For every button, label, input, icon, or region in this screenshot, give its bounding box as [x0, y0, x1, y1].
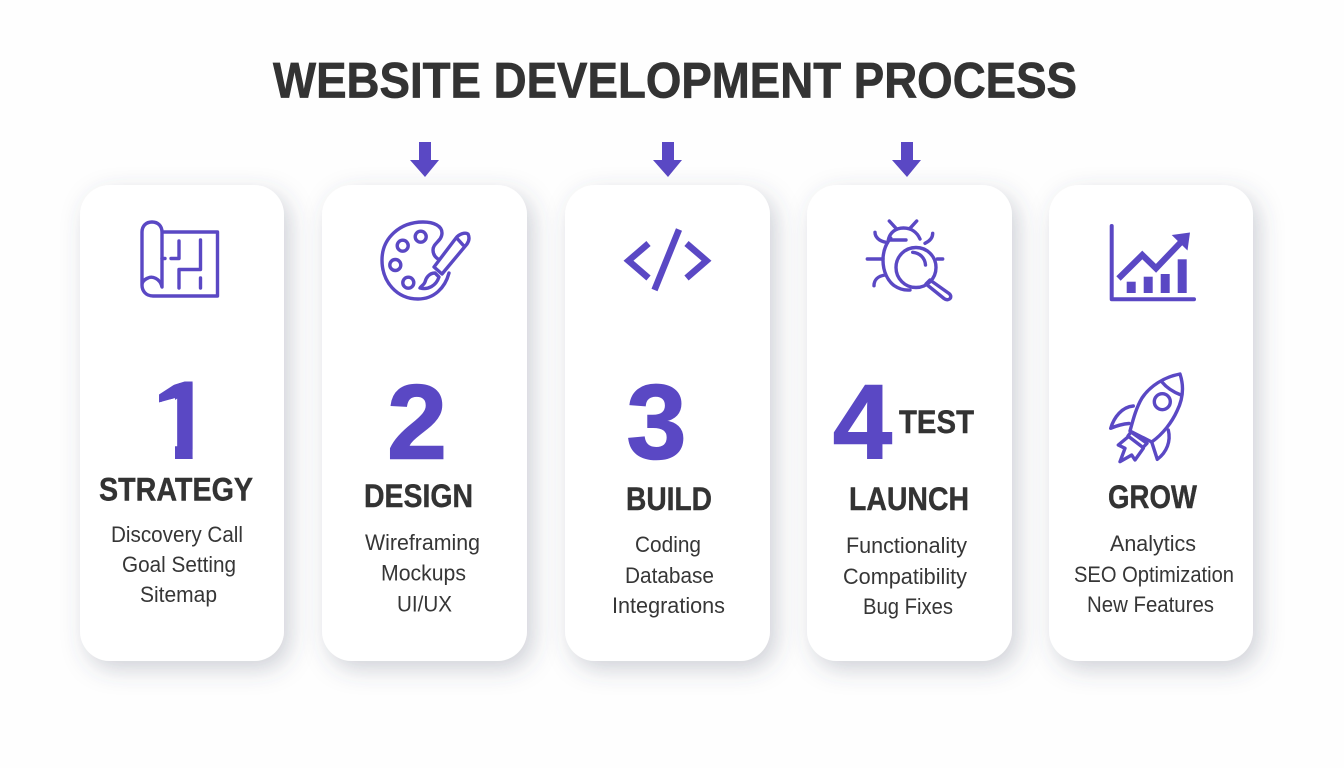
list: build tasks: Integrations [612, 593, 725, 618]
number 4: 4 [833, 364, 892, 482]
panel: test [807, 185, 1012, 661]
icon: growth chart [1112, 226, 1194, 299]
list: grow tasks [1074, 531, 1234, 617]
card background [1049, 185, 1253, 661]
card background [80, 185, 284, 661]
icon: rocket [1111, 374, 1182, 462]
list: design tasks: UI/UX [397, 592, 452, 616]
icon: bug and magnifier [867, 221, 951, 300]
panel: grow [1049, 185, 1253, 661]
list: strategy tasks: Goal Setting [122, 552, 236, 577]
heading: launch: LAUNCH [849, 481, 969, 517]
number 1: 1 [153, 360, 214, 483]
list: test tasks: Bug Fixes [863, 594, 953, 619]
arrow: strategy to design [410, 142, 439, 177]
list: strategy tasks: Sitemap [140, 582, 217, 607]
arrow: build to test [892, 142, 921, 177]
list: strategy tasks [111, 522, 243, 607]
card background [807, 185, 1012, 661]
list: grow tasks: SEO Optimization [1074, 562, 1234, 587]
list: build tasks [612, 532, 725, 618]
list: test tasks [843, 533, 967, 619]
heading: grow: GROW [1108, 479, 1198, 515]
number 3: 3 [626, 364, 686, 482]
title: WEBSITE DEVELOPMENT PROCESS [273, 53, 1077, 109]
list: design tasks: Mockups [381, 560, 466, 586]
list: build tasks: Database [625, 563, 714, 588]
list: test tasks: Compatibility [843, 564, 967, 589]
list: test tasks: Functionality [846, 533, 967, 558]
list: grow tasks: New Features [1087, 592, 1214, 617]
list: strategy tasks: Discovery Call [111, 522, 243, 547]
heading: strategy: STRATEGY [99, 472, 253, 508]
panel: design [322, 185, 527, 661]
icon: code brackets [628, 230, 706, 290]
label: test: TEST [899, 404, 974, 440]
card background [565, 185, 770, 661]
list: design tasks [365, 530, 480, 616]
icon: blueprint map [142, 222, 218, 296]
panel: strategy [80, 185, 284, 661]
heading: build: BUILD [626, 481, 712, 517]
list: grow tasks: Analytics [1110, 531, 1196, 556]
card background [322, 185, 527, 661]
heading: design: DESIGN [364, 478, 473, 514]
list: build tasks: Coding [635, 532, 701, 557]
arrow: design to build [653, 142, 682, 177]
number 2: 2 [387, 364, 447, 482]
icon: palette and brush [382, 222, 469, 299]
list: design tasks: Wireframing [365, 530, 480, 555]
panel: build [565, 185, 770, 661]
